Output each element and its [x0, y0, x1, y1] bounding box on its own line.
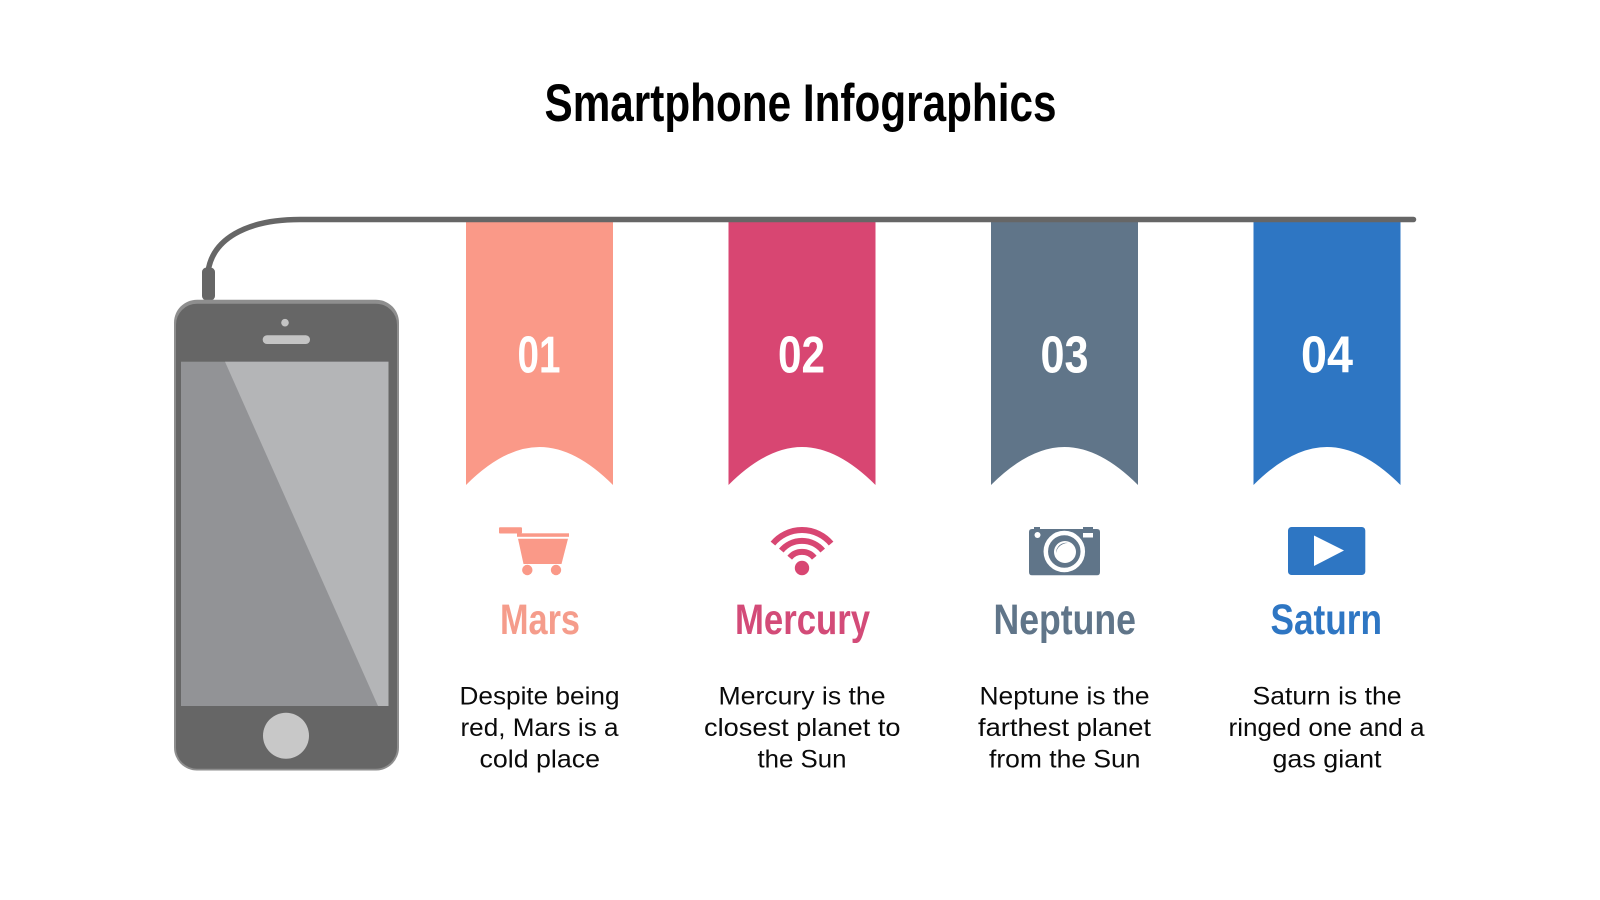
- text: Saturn description: [1228, 682, 1425, 774]
- ribbon 04: [1254, 222, 1400, 485]
- text: Mars description: Despite being: [460, 682, 620, 710]
- text: Neptune description: farthest planet: [978, 714, 1151, 742]
- heading: Neptune: Neptune: [994, 596, 1136, 644]
- ribbon 01: [466, 222, 613, 485]
- text: Mars description: red, Mars is a: [460, 714, 619, 742]
- text: Saturn description: Saturn is the: [1252, 682, 1402, 710]
- title: Smartphone Infographics: [544, 74, 1056, 133]
- icon: camera: [1029, 527, 1100, 575]
- text: Neptune description: from the Sun: [989, 746, 1140, 774]
- ribbon 03: [991, 222, 1138, 485]
- text: Saturn description: ringed one and a: [1228, 714, 1425, 742]
- screen reflection: [225, 362, 388, 706]
- ribbon 04: 04: [1301, 326, 1353, 384]
- heading: Saturn: Saturn: [1270, 596, 1382, 644]
- heading: Mercury: Mercury: [735, 596, 870, 644]
- ribbon 02: [728, 222, 876, 485]
- text: Mercury description: the Sun: [758, 746, 846, 774]
- text: Mercury description: closest planet to: [704, 714, 900, 742]
- ribbon 01: 01: [518, 326, 560, 384]
- ribbon 02: 02: [778, 326, 825, 384]
- text: Saturn description: gas giant: [1272, 746, 1382, 774]
- text: Mercury description: Mercury is the: [718, 682, 886, 710]
- home button: [263, 713, 309, 759]
- icon: wifi: [773, 530, 831, 575]
- ribbon 03: 03: [1040, 326, 1088, 384]
- phone speaker: [263, 335, 310, 344]
- text: Mars description: cold place: [480, 746, 600, 774]
- smartphone: [174, 300, 399, 770]
- charging cable: [202, 220, 1414, 300]
- icon: play button: [1288, 527, 1365, 575]
- icon: shopping cart: [499, 527, 569, 575]
- text: Mars description: [460, 682, 620, 774]
- heading: Mars: Mars: [500, 596, 580, 644]
- text: Neptune description: Neptune is the: [980, 682, 1150, 710]
- phone camera dot: [281, 319, 289, 327]
- text: Mercury description: [704, 682, 900, 774]
- phone screen: [181, 362, 388, 706]
- text: Neptune description: [978, 682, 1151, 774]
